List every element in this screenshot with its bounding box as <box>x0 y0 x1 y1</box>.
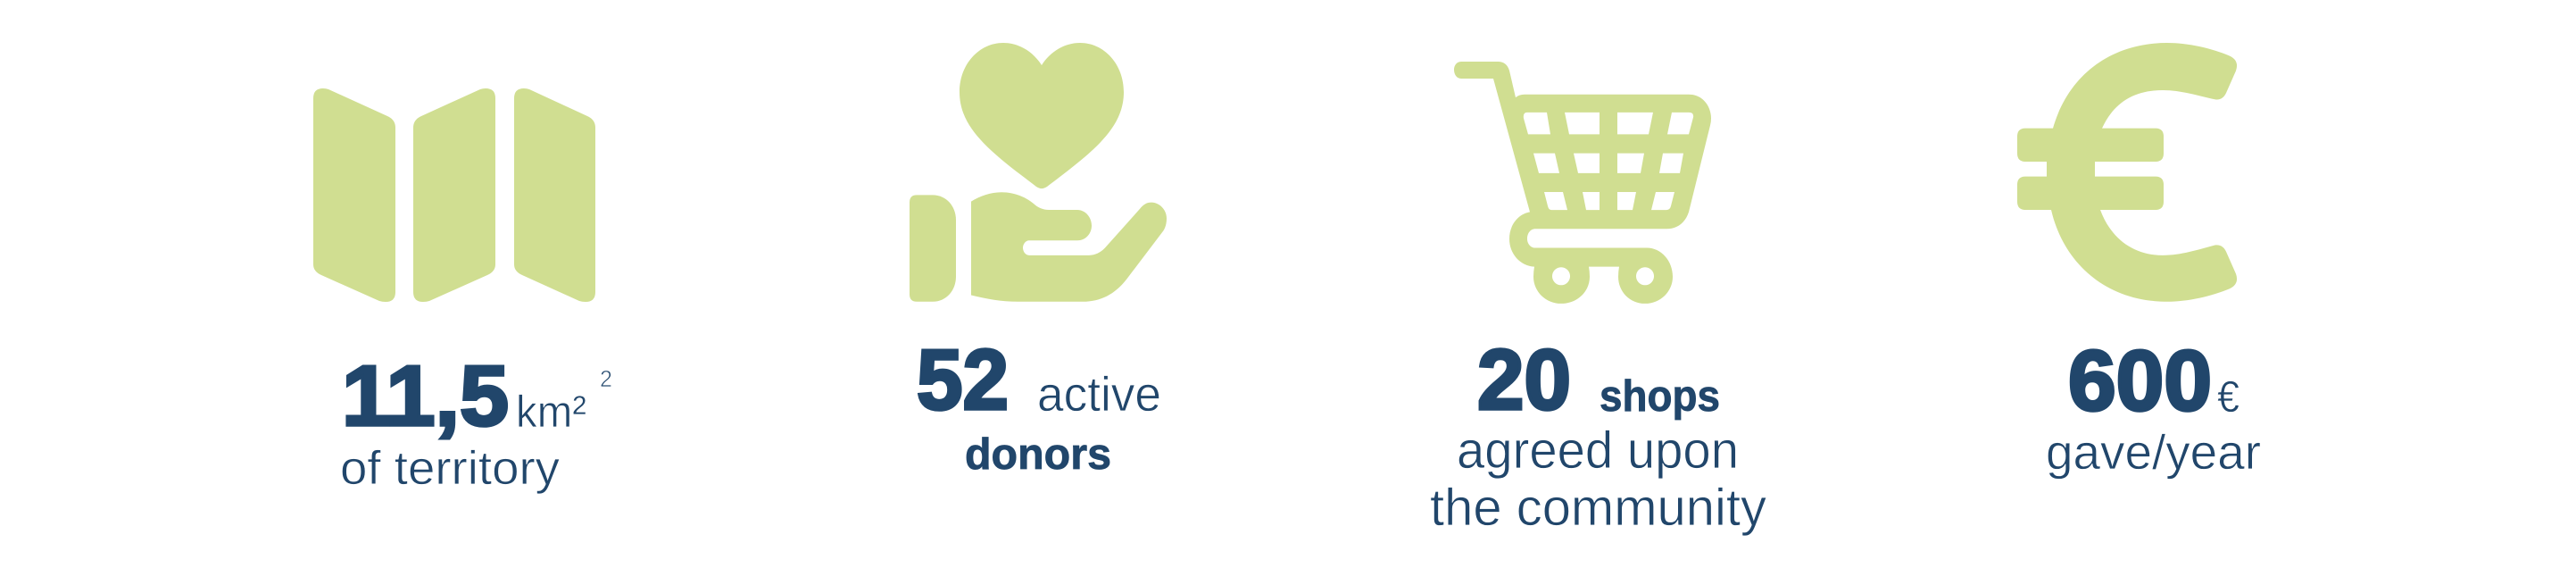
panel: shops <box>1430 62 1766 537</box>
figure: 20 shops: 20 <box>1477 332 1571 428</box>
figure: 20 shops <box>1477 332 1720 428</box>
panel: territory <box>313 88 612 495</box>
figure: 20 shops: shops <box>1600 372 1720 421</box>
icon: shopping cart <box>1454 62 1711 304</box>
text: of territory: of territory <box>340 442 561 495</box>
panel: euros <box>2017 43 2261 480</box>
icon: folded map <box>313 88 595 302</box>
figure: 11,5 km²: 11,5 <box>342 348 509 444</box>
figure: 11,5 km²: km² <box>516 387 586 437</box>
text: gave/year: gave/year <box>2046 424 2261 480</box>
panel: donors <box>910 43 1167 479</box>
text: agreed upon the community <box>1430 422 1766 537</box>
icon: euro sign <box>2017 43 2237 302</box>
figure: 11,5 km² <box>342 348 612 444</box>
figure: 52 active: 52 <box>917 332 1009 428</box>
text: donors: donors <box>965 430 1111 479</box>
icon: hand holding heart <box>910 43 1167 302</box>
figure: 600 €: 600 <box>2068 333 2212 429</box>
figure: 52 active: active <box>1037 366 1161 422</box>
text: agreed upon the community: agreed upon <box>1457 422 1739 480</box>
figure: 52 active <box>917 332 1161 428</box>
text: agreed upon the community: the community <box>1430 479 1766 537</box>
figure: 600 €: € <box>2217 373 2239 422</box>
figure: 11,5 km²: 2 <box>600 365 612 392</box>
